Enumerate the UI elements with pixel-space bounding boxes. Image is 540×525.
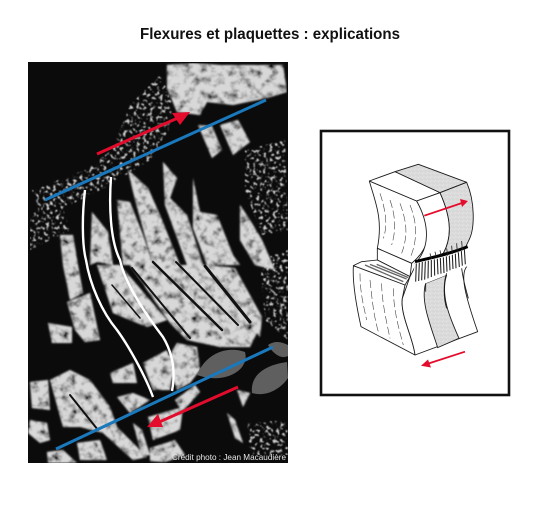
blue line: top [45,100,266,200]
lower block: front face [402,267,478,355]
shear zone [412,247,468,284]
lower block: left face [353,263,415,355]
upper block: left face [369,181,428,263]
red arrow: bottom [147,387,238,427]
white line: left plaquette edge [83,190,153,397]
panel: photo [28,62,288,463]
panel: block diagram [321,131,509,395]
photo: dark cracks in the rock [70,262,250,430]
photo: leaves [197,342,288,394]
lower block: top face [353,260,410,285]
white line: right plaquette edge [110,177,174,391]
lower block: stippled band [424,275,459,348]
red arrow: lower block [421,352,465,368]
upper block: top face [369,172,440,201]
diagram: deformed block [353,164,478,355]
upper block: stippled top band [395,164,467,193]
infographic [28,28,510,463]
red arrow: top [97,112,190,154]
panel frame [321,131,509,395]
title: Flexures et plaquettes : explications [140,26,400,43]
photo credit: Crédit photo : Jean Macaudière [172,452,286,462]
red arrow: upper block [424,199,468,216]
hatching on faces [360,193,416,345]
photo background [28,62,288,463]
upper block: stippled front band [440,182,473,253]
blue line: bottom [56,347,273,449]
upper block: front face [415,193,449,263]
step between blocks [377,248,412,277]
photo: rock columns [28,63,287,463]
photo: vegetation specks [30,75,288,455]
